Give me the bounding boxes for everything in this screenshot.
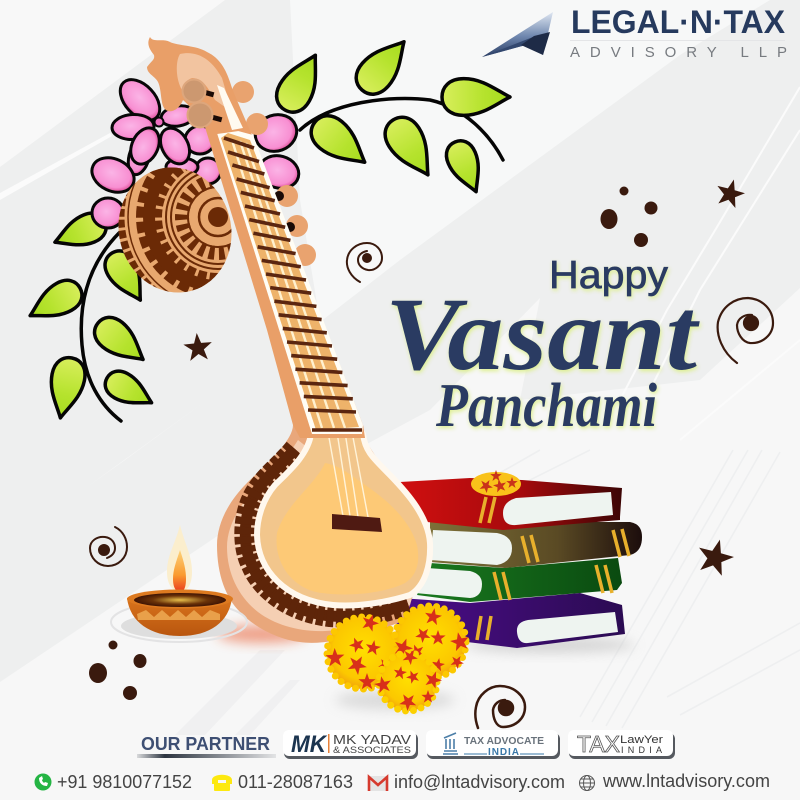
decorative leaf ring bbox=[245, 449, 408, 616]
Vasant: Vasant bbox=[385, 277, 700, 392]
small marigold on book bbox=[471, 470, 521, 496]
veena top gourd bbox=[118, 168, 232, 292]
marigold right bbox=[391, 606, 473, 678]
flame halo bbox=[167, 525, 192, 592]
books bbox=[390, 470, 642, 653]
book: green bbox=[415, 558, 622, 602]
right pegs bbox=[232, 81, 316, 266]
title: Happy Vasant Panchami bbox=[385, 254, 700, 440]
bridge bbox=[332, 514, 382, 532]
logo subtitle: ADVISORY LLP bbox=[570, 44, 787, 61]
partner: Tax Lawyer India: INDIA bbox=[621, 745, 662, 755]
fret strings bbox=[232, 140, 345, 428]
flame bbox=[173, 550, 186, 592]
veena shadow bbox=[217, 625, 307, 643]
spiral bottom bbox=[475, 686, 525, 728]
partner strip bbox=[137, 730, 675, 759]
marigold left bbox=[324, 612, 399, 689]
book: olive bbox=[430, 522, 642, 568]
dot clusters bbox=[89, 186, 658, 700]
bowl bbox=[127, 598, 232, 636]
Happy: Happy bbox=[549, 254, 669, 297]
spiral near neck bbox=[347, 243, 382, 282]
neck bbox=[205, 77, 365, 438]
partner: MK Yadav: & ASSOCIATES bbox=[333, 745, 411, 755]
gourd outer bbox=[217, 425, 431, 643]
contact bar bbox=[34, 771, 770, 792]
partner: Tax Advocate India: INDIA bbox=[488, 747, 519, 758]
partner: MK Yadav: MK bbox=[291, 731, 328, 758]
logo title: LEGAL·N·TAX bbox=[571, 4, 786, 40]
website: www.lntadvisory.com bbox=[602, 771, 770, 791]
partner: MK Yadav: MK YADAV bbox=[333, 732, 411, 747]
left pegs bbox=[203, 90, 214, 97]
spiral left bbox=[90, 527, 127, 566]
marigold bottom bbox=[372, 646, 444, 713]
soundboard bbox=[257, 434, 430, 606]
diya lamp bbox=[111, 525, 247, 642]
marigolds shadow bbox=[335, 690, 455, 710]
partner: Tax Lawyer India: LawYer bbox=[620, 734, 663, 746]
phone number: +91 9810077152 bbox=[57, 772, 192, 792]
Panchami: Panchami bbox=[435, 372, 657, 440]
book: red bbox=[400, 478, 622, 530]
book: purple bbox=[390, 593, 625, 648]
flowers bbox=[86, 72, 302, 228]
strings bbox=[328, 432, 368, 517]
branches bbox=[81, 99, 503, 421]
spiral right bbox=[718, 298, 773, 363]
icon: logo arrow bbox=[482, 12, 553, 57]
veena neck and head bbox=[147, 37, 365, 438]
partner: Tax Advocate India: TAX ADVOCATE bbox=[464, 735, 544, 747]
head scroll bbox=[147, 37, 246, 134]
our partner heading: OUR PARTNER bbox=[141, 734, 270, 754]
books shadow bbox=[465, 637, 635, 653]
landline number: 011-28087163 bbox=[238, 772, 353, 792]
logo: Legal-N-Tax Advisory LLP bbox=[482, 4, 787, 61]
spirals bbox=[90, 243, 773, 728]
lamp shadow rings bbox=[111, 602, 247, 642]
leaves bbox=[23, 30, 510, 421]
stars bbox=[182, 176, 748, 578]
frets bbox=[224, 138, 362, 430]
email: info@lntadvisory.com bbox=[394, 772, 565, 792]
partner: MK Yadav bbox=[283, 730, 418, 759]
icon: whatsapp bbox=[34, 774, 52, 790]
partner: Tax Lawyer India: TAX bbox=[577, 731, 620, 757]
partner: Tax Lawyer India bbox=[568, 730, 675, 759]
icon: mail bbox=[368, 776, 388, 791]
marigolds bbox=[324, 606, 473, 713]
partner: Tax Advocate India bbox=[426, 730, 560, 759]
icon: globe bbox=[580, 776, 594, 790]
icon: telephone bbox=[212, 775, 232, 791]
veena body bbox=[217, 425, 431, 643]
